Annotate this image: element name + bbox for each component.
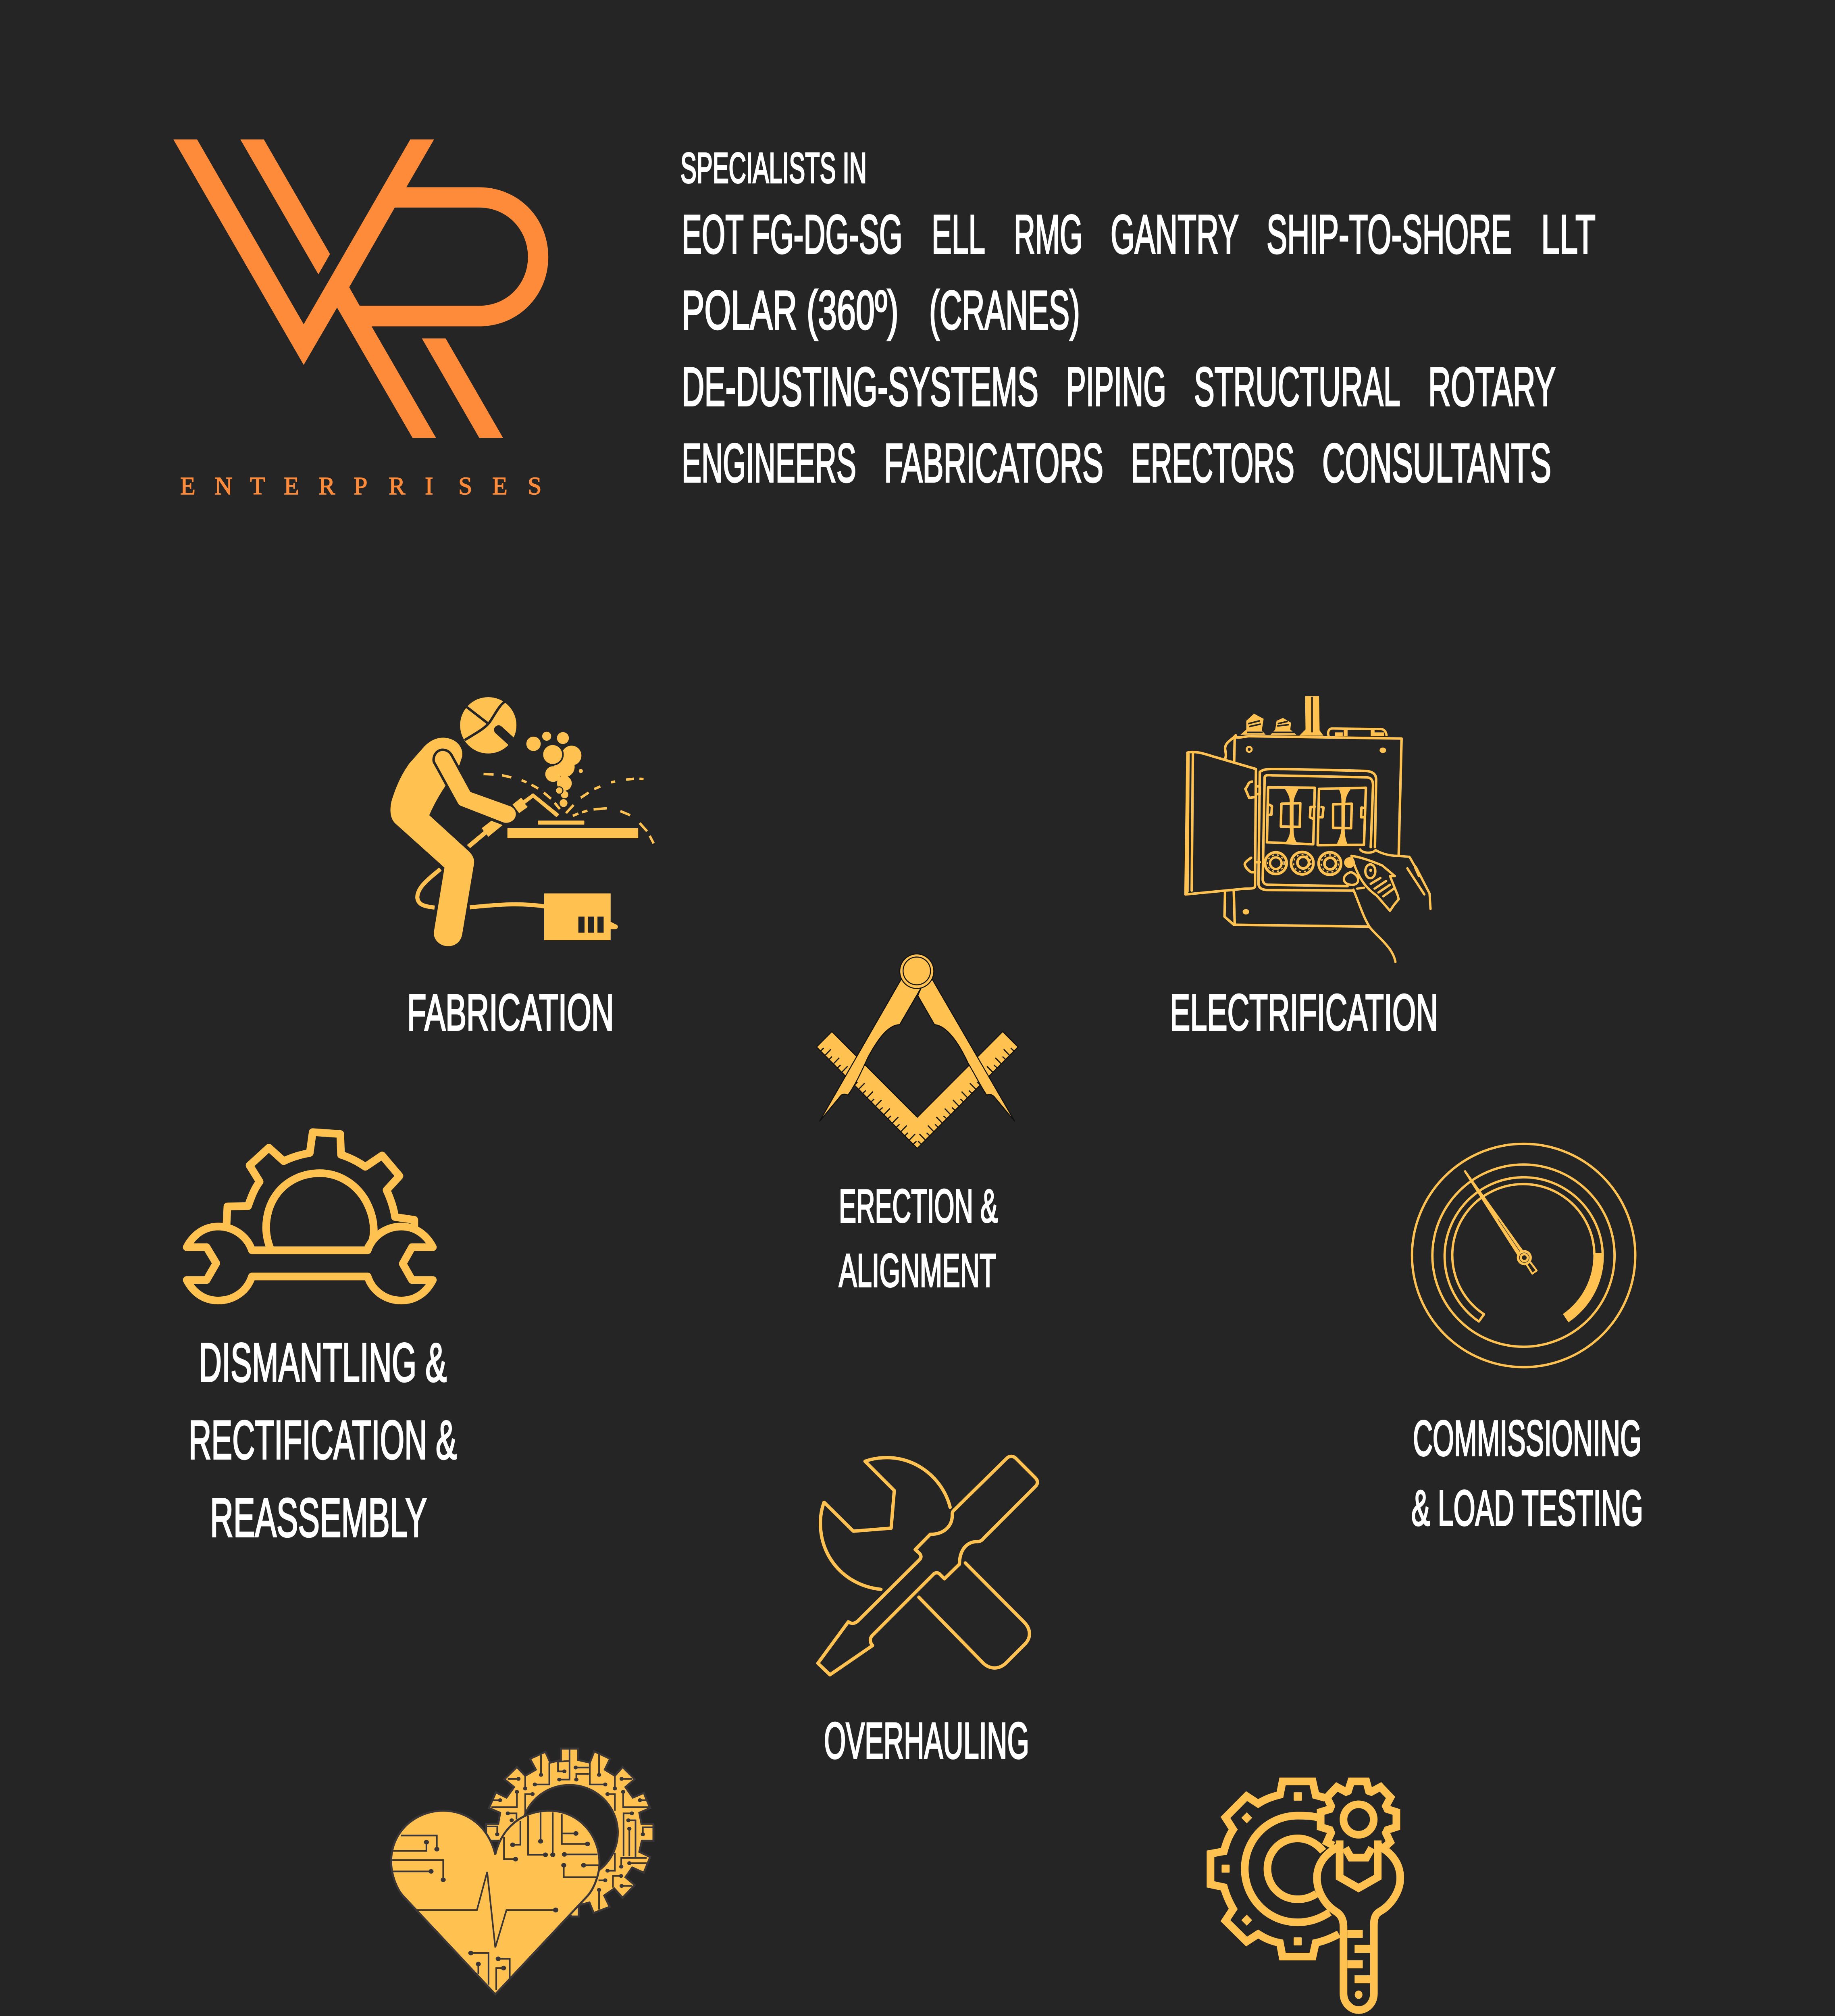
- icon: welder fabrication: [391, 697, 653, 946]
- line: systems: ROTARY: [1428, 356, 1556, 417]
- heading: specialists in: SPECIALISTS IN: [680, 144, 867, 192]
- line: crane types: EOT FG-DG-SG: [682, 204, 903, 265]
- line: crane types: ELL: [932, 204, 985, 265]
- label: overhauling: OVERHAULING: [824, 1712, 1029, 1769]
- label: electrification: ELECTRIFICATION: [1170, 984, 1438, 1041]
- label: fabrication: FABRICATION: [407, 984, 614, 1041]
- line: roles: [682, 432, 1551, 494]
- label: dismantling, rectification, reassembly: REASSEMBLY: [210, 1487, 427, 1548]
- icon: crossed wrench and screwdriver: [818, 1456, 1037, 1675]
- label: erection and alignment: [839, 1180, 998, 1297]
- label: dismantling, rectification, reassembly: [189, 1332, 457, 1548]
- label: commissioning and load testing: [1411, 1411, 1643, 1536]
- logo: VR mark with ENTERPRISES wordmark: [173, 140, 548, 500]
- label: commissioning and load testing: & LOAD TESTING: [1411, 1481, 1643, 1536]
- label: dismantling, rectification, reassembly: RECTIFICATION &: [189, 1409, 457, 1470]
- line: roles: CONSULTANTS: [1322, 432, 1551, 494]
- label: erection and alignment: ERECTION &: [839, 1180, 998, 1232]
- line: systems: PIPING: [1066, 356, 1166, 417]
- line: crane types: GANTRY: [1111, 204, 1239, 265]
- label: erection and alignment: ALIGNMENT: [839, 1244, 996, 1297]
- icon: gears and spanner maintenance: [1211, 1781, 1400, 2010]
- line: systems: DE-DUSTING-SYSTEMS: [682, 356, 1038, 417]
- label: dismantling, rectification, reassembly: DISMANTLING &: [199, 1332, 447, 1393]
- line: crane types: [682, 204, 1596, 265]
- line: systems: STRUCTURAL: [1194, 356, 1400, 417]
- line: polar cranes: (CRANES): [929, 279, 1080, 341]
- icon: circuit heart and gear: [391, 1749, 653, 1994]
- header text: specialisms: [680, 144, 1596, 494]
- line: roles: ENGINEERS: [682, 432, 856, 494]
- icon: gear and wrench: [187, 1132, 433, 1300]
- icon: pressure gauge: [1412, 1144, 1635, 1367]
- line: crane types: RMG: [1014, 204, 1083, 265]
- icon: square and compass: [816, 954, 1018, 1148]
- line: polar cranes: POLAR (360º): [682, 279, 899, 341]
- line: crane types: LLT: [1541, 204, 1596, 265]
- icon: electrical panel with hand: [1186, 696, 1431, 962]
- label: commissioning and load testing: COMMISSIONING: [1413, 1411, 1642, 1466]
- line: crane types: SHIP-TO-SHORE: [1267, 204, 1512, 265]
- line: roles: ERECTORS: [1131, 432, 1294, 494]
- logo mark: [173, 140, 548, 438]
- logo wordmark: ENTERPRISES: [180, 473, 541, 500]
- line: roles: FABRICATORS: [884, 432, 1103, 494]
